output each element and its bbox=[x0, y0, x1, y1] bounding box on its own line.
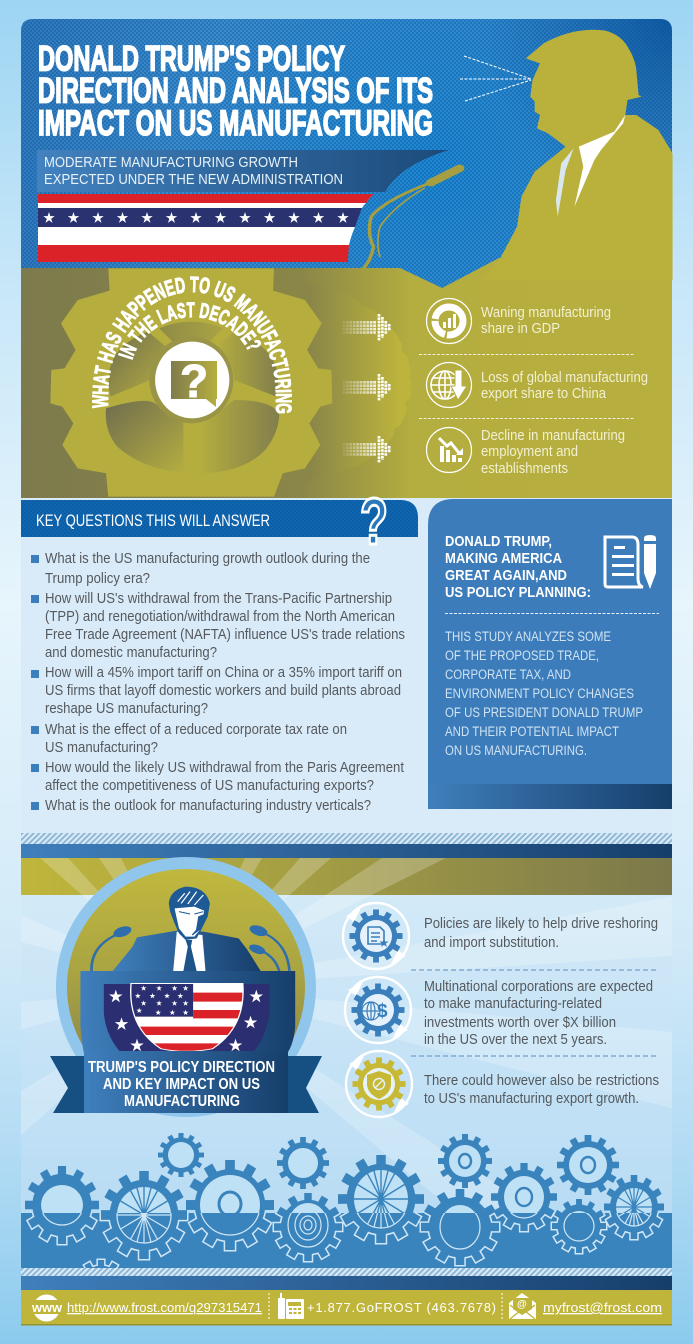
icon: investment gear bbox=[345, 977, 411, 1043]
title: DIRECTION AND ANALYSIS OF ITS bbox=[38, 72, 433, 110]
text: employment decline: establishments bbox=[481, 461, 568, 477]
body text: OF US PRESIDENT DONALD TRUMP bbox=[445, 705, 643, 720]
footer bbox=[21, 1290, 672, 1326]
text: investment: Multinational corporations are expected bbox=[424, 978, 653, 995]
text: investment: in the US over the next 5 years. bbox=[424, 1031, 607, 1048]
body text: OF THE PROPOSED TRADE, bbox=[445, 648, 599, 663]
heading: MAKING AMERICA bbox=[445, 550, 562, 567]
arrows bbox=[344, 314, 389, 463]
curved heading: IN THE LAST DECADE? bbox=[118, 302, 262, 360]
icon: restrictions gear bbox=[346, 1051, 412, 1117]
microphone bbox=[362, 168, 460, 270]
text: waning share: share in GDP bbox=[481, 321, 560, 337]
list: key questions: How will a 45% import tariff on China or a 35% import tariff on bbox=[45, 664, 402, 681]
panel: key questions header: KEY QUESTIONS THIS WILL ANSWER bbox=[36, 512, 270, 530]
text: export share: Loss of global manufacturing bbox=[481, 370, 648, 386]
icon: question bubble bbox=[171, 355, 217, 407]
icon: employment decline bbox=[426, 428, 472, 472]
icon: GDP share bbox=[426, 298, 472, 344]
heading: GREAT AGAIN,AND bbox=[445, 567, 567, 584]
text: reshoring: Policies are likely to help drive reshoring bbox=[424, 915, 658, 932]
bottom bands bbox=[21, 1268, 672, 1290]
icon: export share bbox=[426, 362, 472, 408]
link: website: http://www.frost.com/q297315471 bbox=[67, 1300, 262, 1315]
text: waning share: Waning manufacturing bbox=[481, 305, 611, 321]
subtitle banner bbox=[37, 150, 449, 192]
icon: email: @ bbox=[517, 1299, 527, 1310]
heading: US POLICY PLANNING: bbox=[445, 584, 591, 601]
title bbox=[38, 40, 433, 143]
icon: phone bbox=[278, 1293, 304, 1319]
curved heading: WHAT HAS HAPPENED TO US MANUFACTURING bbox=[92, 276, 292, 414]
text: restrictions bbox=[424, 1072, 659, 1107]
text: employment decline: Decline in manufacturing bbox=[481, 428, 625, 444]
body text: CORPORATE TAX, AND bbox=[445, 667, 571, 682]
icon: www bbox=[31, 1294, 63, 1322]
lower gear outlines bbox=[26, 1213, 664, 1268]
list: key questions: How will US's withdrawal from the Trans-Pacific Partnership bbox=[45, 590, 392, 607]
text: export share: export share to China bbox=[481, 386, 607, 402]
medallion bbox=[50, 857, 322, 1117]
list: key questions: US manufacturing? bbox=[45, 739, 158, 756]
text: investment bbox=[424, 978, 653, 1048]
list: key questions: affect the competitiveness of US manufacturing exports? bbox=[45, 777, 374, 794]
blue base bbox=[21, 1213, 672, 1268]
body text: THIS STUDY ANALYZES SOME bbox=[445, 629, 611, 644]
icon: question bubble: ? bbox=[180, 355, 208, 407]
gears illustration bbox=[21, 1133, 672, 1268]
panel: header bbox=[21, 19, 672, 300]
list: key questions: and domestic manufacturing? bbox=[45, 644, 217, 661]
flag stripes banner bbox=[38, 194, 374, 262]
podium bbox=[80, 971, 295, 1053]
big gear bbox=[50, 268, 332, 497]
list: key questions: Trump policy era? bbox=[45, 570, 150, 587]
heading bbox=[445, 533, 591, 601]
list: key questions: How would the likely US withdrawal from the Paris Agreement bbox=[45, 759, 405, 776]
subtitle banner: MODERATE MANUFACTURING GROWTH bbox=[44, 154, 298, 171]
text: reshoring bbox=[424, 915, 658, 951]
body text: ENVIRONMENT POLICY CHANGES bbox=[445, 686, 634, 701]
list: key questions: What is the effect of a reduced corporate tax rate on bbox=[45, 721, 347, 738]
list: key questions: (TPP) and renegotiation/withdrawal from the North American bbox=[45, 608, 395, 625]
panel: key questions background bbox=[21, 498, 672, 833]
ribbon: TRUMP'S POLICY DIRECTION bbox=[88, 1059, 275, 1076]
text: investment: investments worth over $X billion bbox=[424, 1014, 616, 1031]
icon: question mark: ? bbox=[360, 484, 388, 558]
list: key questions: US firms that layoff domestic workers and build plants abroad bbox=[45, 682, 401, 699]
title: DONALD TRUMP'S POLICY bbox=[38, 40, 345, 78]
ribbon bbox=[50, 1051, 322, 1113]
subtitle banner: EXPECTED UNDER THE NEW ADMINISTRATION bbox=[44, 171, 343, 188]
icon: reshoring gear bbox=[343, 903, 409, 969]
panel: key questions header bbox=[21, 484, 418, 558]
list: key questions bbox=[31, 550, 405, 814]
text: export share bbox=[481, 370, 648, 402]
title: IMPACT ON US MANUFACTURING bbox=[38, 104, 433, 143]
silhouette of speaker bbox=[482, 30, 673, 280]
icon: investment gear: $ bbox=[377, 1001, 388, 1022]
icon: www: www bbox=[31, 1300, 63, 1315]
link: email: myfrost@frost.com bbox=[543, 1300, 662, 1315]
list: key questions: What is the outlook for manufacturing industry verticals? bbox=[45, 797, 371, 814]
heading: DONALD TRUMP, bbox=[445, 533, 552, 550]
body text: ON US MANUFACTURING. bbox=[445, 743, 587, 758]
divider bands bbox=[21, 833, 672, 858]
sight lines bbox=[460, 56, 531, 101]
text: employment decline: employment and bbox=[481, 444, 578, 460]
panel: what happened section bbox=[21, 30, 673, 538]
speaker figure bbox=[91, 887, 289, 971]
body text: AND THEIR POTENTIAL IMPACT bbox=[445, 724, 619, 739]
panel: policy impact bbox=[21, 857, 672, 1213]
icon: email bbox=[509, 1293, 536, 1319]
text: reshoring: and import substitution. bbox=[424, 934, 559, 951]
rays bbox=[21, 858, 672, 1213]
ghost gear bbox=[180, 293, 400, 473]
icon: document and pencil bbox=[605, 535, 656, 589]
text: restrictions: There could however also be restrictions bbox=[424, 1072, 659, 1089]
body text bbox=[445, 629, 643, 758]
text: employment decline bbox=[481, 428, 625, 477]
upper gears bbox=[25, 1133, 664, 1265]
text: restrictions: to US's manufacturing export growth. bbox=[424, 1090, 639, 1107]
ribbon: AND KEY IMPACT ON US bbox=[103, 1076, 260, 1093]
panel: policy planning bbox=[428, 499, 672, 809]
text: investment: to make manufacturing-related bbox=[424, 995, 602, 1012]
list: key questions: reshape US manufacturing? bbox=[45, 700, 208, 717]
list: key questions: What is the US manufacturing growth outlook during the bbox=[45, 550, 370, 567]
text: phone number: +1.877.GoFROST (463.7678) bbox=[307, 1300, 496, 1315]
text: waning share bbox=[481, 305, 611, 337]
list: key questions: Free Trade Agreement (NAFTA) influence US's trade relations bbox=[45, 626, 405, 643]
ribbon: MANUFACTURING bbox=[124, 1093, 240, 1110]
